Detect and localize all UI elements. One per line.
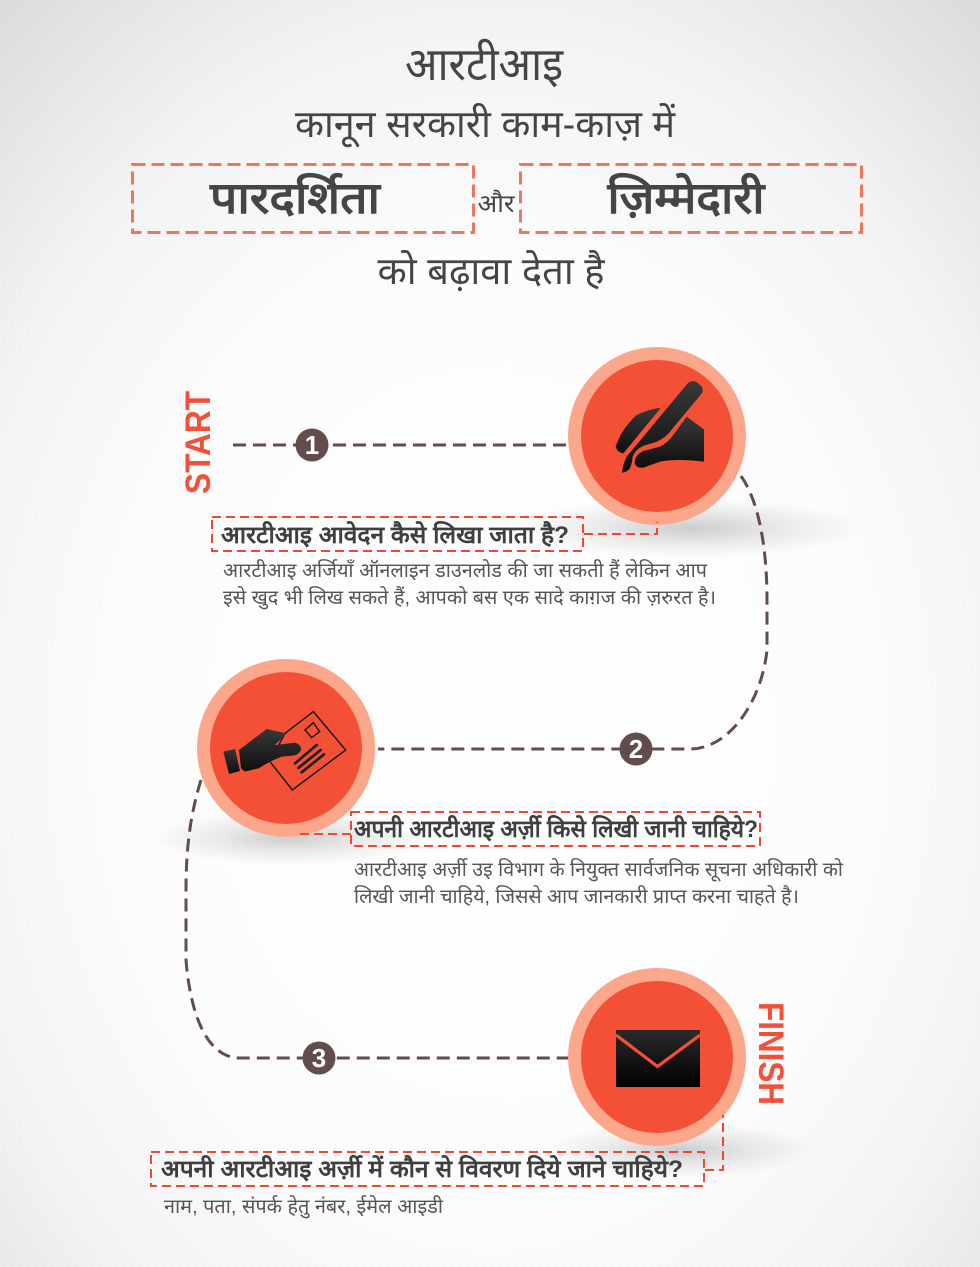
- circle 3 with envelope icon: [568, 968, 746, 1146]
- route curve from step 2 to step 3: [186, 780, 572, 1058]
- icon: hand holding postcard: [223, 712, 346, 790]
- step 1 description: आरटीआइ अर्जियाँ ऑनलाइन डाउनलोड की जा सकती हैं लेकिन आप: [223, 559, 708, 582]
- highlight box: transparency: [132, 164, 474, 232]
- route curve from step 1 to step 2: [378, 476, 767, 749]
- highlight box: transparency: पारदर्शिता: [209, 172, 382, 223]
- step badge 3: 3: [312, 1043, 326, 1073]
- step 1 question: आरटीआइ आवेदन कैसे लिखा जाता है?: [221, 521, 569, 549]
- step 3 connector: [705, 1115, 723, 1170]
- step 1 description: [223, 559, 716, 610]
- shadow under circle 2: [152, 811, 428, 865]
- title: आरटीआइ: [405, 38, 564, 90]
- finish label: FINISH: [751, 1002, 790, 1105]
- shadow under circle 3: [545, 1123, 815, 1177]
- step 2 description: [354, 858, 844, 908]
- step badge 2: [620, 732, 652, 766]
- icon: envelope: [616, 1030, 700, 1087]
- step badge 3: [302, 1042, 336, 1074]
- highlight box: accountability: ज़िम्मेदारी: [606, 172, 766, 223]
- shadow under circle 1: [518, 498, 862, 558]
- step 2 question: अपनी आरटीआइ अर्ज़ी किसे लिखी जानी चाहिये?: [354, 815, 758, 843]
- step 1 connector: [584, 522, 657, 534]
- circle 1 with writing hand icon: [568, 347, 746, 525]
- icon: hand writing with pen: [616, 381, 704, 473]
- route segment 1: [233, 444, 572, 446]
- step 3 question: अपनी आरटीआइ अर्ज़ी में कौन से विवरण दिये जाने चाहिये?: [161, 1155, 683, 1183]
- highlight box: accountability: [520, 164, 862, 232]
- step badge 1: 1: [305, 430, 319, 460]
- subtitle line: कानून सरकारी काम-काज़ में: [295, 102, 676, 148]
- step 3 description: नाम, पता, संपर्क हेतु नंबर, ईमेल आइडी: [164, 1195, 444, 1219]
- closing headline line: को बढ़ावा देता है: [378, 249, 605, 293]
- step 2 connector: [300, 833, 351, 835]
- step 2 description: लिखी जानी चाहिये, जिससे आप जानकारी प्राप्त करना चाहते है।: [354, 885, 799, 908]
- start label: START: [179, 391, 218, 494]
- connector word: and: और: [478, 189, 515, 218]
- step badge 2: 2: [629, 734, 643, 764]
- step 2 description: आरटीआइ अर्ज़ी उइ विभाग के नियुक्त सार्वजनिक सूचना अधिकारी को: [354, 858, 844, 882]
- step badge 1: [296, 428, 328, 462]
- step 1 description: इसे खुद भी लिख सकते हैं, आपको बस एक सादे काग़ज की ज़रुरत है।: [223, 586, 716, 610]
- circle 2 with hand holding card icon: [197, 659, 375, 837]
